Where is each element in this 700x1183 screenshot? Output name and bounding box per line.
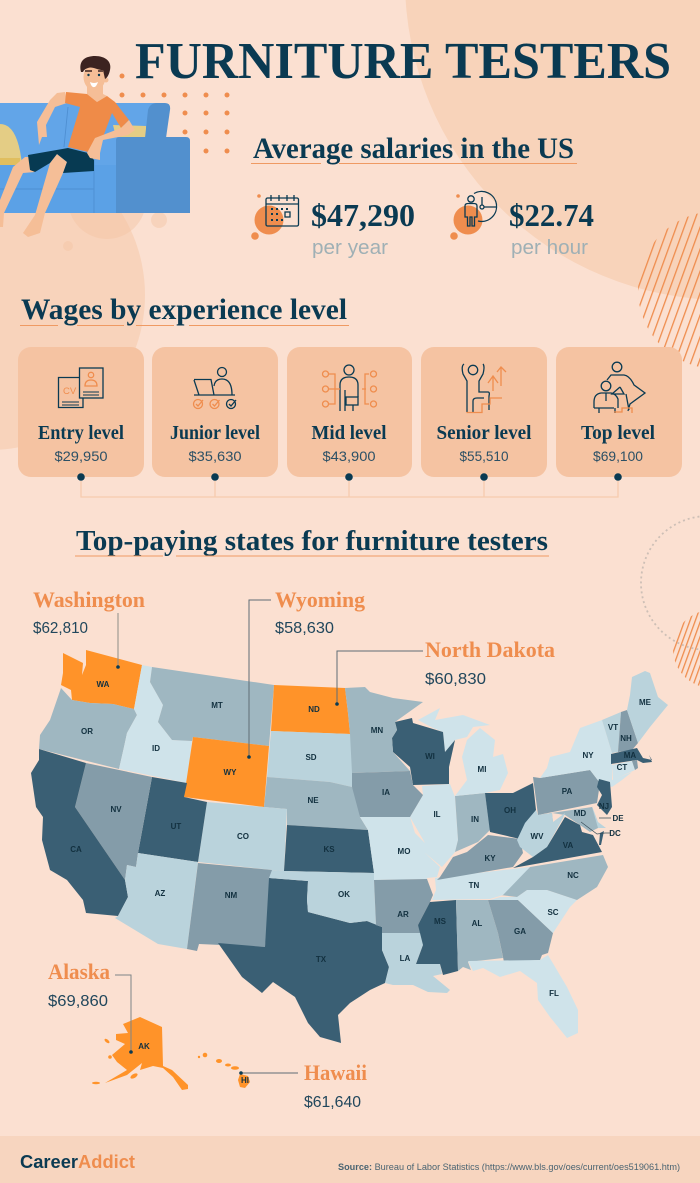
callout: Alaska bbox=[48, 959, 133, 1054]
state labels: MT bbox=[211, 701, 223, 710]
state labels: MD bbox=[574, 809, 586, 818]
state labels: NV bbox=[110, 805, 122, 814]
map of US states bbox=[31, 650, 668, 1090]
label: Senior level bbox=[436, 422, 532, 444]
label: Top level bbox=[581, 422, 655, 444]
state labels: IN bbox=[471, 815, 479, 824]
marker bbox=[345, 473, 353, 481]
state labels: SD bbox=[305, 753, 317, 762]
callout: Alaska: $69,860 bbox=[48, 993, 108, 1010]
icon: laptop and checks bbox=[194, 368, 236, 408]
state labels: TN bbox=[469, 881, 480, 890]
state labels: CT bbox=[617, 763, 627, 772]
state labels: ND bbox=[308, 705, 320, 714]
state labels: MN bbox=[371, 726, 383, 735]
callout: North Dakota bbox=[335, 637, 555, 706]
card: senior level bbox=[421, 347, 547, 481]
state labels: OR bbox=[81, 727, 93, 736]
state labels: FL bbox=[549, 989, 559, 998]
salary value: $22.74 bbox=[509, 197, 594, 233]
illustration: man on sofa bbox=[0, 56, 190, 237]
state labels: ME bbox=[639, 698, 652, 707]
state labels: NY bbox=[582, 751, 594, 760]
background shape: dotted circle bbox=[641, 516, 700, 650]
callout: Washington bbox=[33, 587, 145, 669]
heading: top-paying states: Top-paying states for furniture testers bbox=[76, 525, 548, 557]
icon: superhero leader bbox=[594, 362, 645, 413]
state labels: HI bbox=[241, 1076, 249, 1085]
state labels: AK bbox=[138, 1042, 150, 1051]
decorative circles under sofa bbox=[63, 161, 167, 251]
icon: person with branches bbox=[322, 365, 376, 411]
state labels bbox=[70, 680, 652, 1085]
card: top level bbox=[556, 347, 682, 481]
state labels: OH bbox=[504, 806, 516, 815]
background shape: left circle bbox=[0, 140, 145, 450]
icon: climbing stairs bbox=[462, 364, 506, 412]
wage: $29,950 bbox=[54, 448, 108, 464]
state labels: SC bbox=[547, 908, 559, 917]
Hawaii bbox=[198, 1053, 250, 1088]
state labels: MA bbox=[624, 751, 636, 760]
background shape: striped circle upper bbox=[638, 211, 700, 369]
callout: Alaska: Alaska bbox=[48, 959, 110, 984]
state labels: OK bbox=[338, 890, 350, 899]
state labels: NM bbox=[225, 891, 238, 900]
icon: calendar bbox=[251, 194, 298, 240]
heading: wages by experience: Wages by experience level bbox=[21, 293, 347, 326]
state labels: VT bbox=[608, 723, 618, 732]
orange dot grid bbox=[120, 74, 230, 154]
icon: CV documents: CV bbox=[63, 386, 77, 397]
callout: Hawaii bbox=[239, 1060, 367, 1111]
background shape: top right circle bbox=[405, 0, 700, 300]
state labels: VA bbox=[563, 841, 573, 850]
state labels: WV bbox=[531, 832, 544, 841]
salary unit: per hour bbox=[511, 237, 588, 259]
state labels: GA bbox=[514, 927, 526, 936]
state labels: MS bbox=[434, 917, 447, 926]
salary value: $47,290 bbox=[311, 197, 415, 233]
state labels: TX bbox=[316, 955, 327, 964]
state labels: ID bbox=[152, 744, 160, 753]
state labels: AR bbox=[397, 910, 409, 919]
callout: Hawaii: $61,640 bbox=[304, 1094, 361, 1111]
state labels: IA bbox=[382, 788, 390, 797]
state labels: UT bbox=[171, 822, 181, 831]
wage: $43,900 bbox=[322, 448, 376, 464]
callout: Washington: Washington bbox=[33, 587, 145, 612]
stat: hourly salary bbox=[450, 191, 594, 259]
heading: average salaries: Average salaries in the US bbox=[253, 132, 574, 165]
state labels: DC bbox=[609, 829, 621, 838]
state labels: WI bbox=[425, 752, 435, 761]
state labels: WY bbox=[224, 768, 237, 777]
title: FURNITURE TESTERS bbox=[135, 33, 671, 90]
logo: CareerAddict bbox=[20, 1152, 135, 1172]
state labels: AL bbox=[472, 919, 482, 928]
state labels: NC bbox=[567, 871, 579, 880]
state labels: NE bbox=[307, 796, 319, 805]
callout: North Dakota: North Dakota bbox=[425, 637, 555, 662]
marker bbox=[77, 473, 85, 481]
marker bbox=[614, 473, 622, 481]
marker bbox=[480, 473, 488, 481]
wage: $55,510 bbox=[460, 448, 509, 464]
state labels: CO bbox=[237, 832, 249, 841]
state labels: NH bbox=[620, 734, 632, 743]
salary unit: per year bbox=[312, 237, 388, 259]
state labels: MI bbox=[478, 765, 486, 774]
state labels: IL bbox=[433, 810, 441, 819]
icon: clock and person bbox=[450, 191, 497, 240]
callout: Wyoming: Wyoming bbox=[275, 587, 365, 612]
Alaska bbox=[92, 1017, 188, 1090]
stat: yearly salary bbox=[251, 194, 415, 259]
state labels: WA bbox=[97, 680, 110, 689]
callout: Hawaii: Hawaii bbox=[304, 1060, 367, 1085]
state labels: LA bbox=[400, 954, 411, 963]
callout: North Dakota: $60,830 bbox=[425, 671, 486, 688]
state labels: CA bbox=[70, 845, 82, 854]
state labels: AZ bbox=[155, 889, 165, 898]
card: entry level bbox=[18, 347, 144, 481]
background shape: striped circle lower bbox=[673, 610, 700, 688]
callout: Wyoming: $58,630 bbox=[275, 620, 334, 637]
callout: Washington: $62,810 bbox=[33, 620, 88, 637]
marker bbox=[211, 473, 219, 481]
wage: $35,630 bbox=[188, 448, 242, 464]
label: Junior level bbox=[170, 422, 260, 444]
label: Mid level bbox=[312, 422, 387, 444]
label: Entry level bbox=[38, 422, 124, 444]
state labels: PA bbox=[562, 787, 572, 796]
state labels: KY bbox=[484, 854, 496, 863]
state labels: NJ bbox=[599, 802, 609, 811]
footer bar bbox=[0, 1136, 700, 1183]
state labels: DE bbox=[612, 814, 624, 823]
wage: $69,100 bbox=[593, 448, 643, 464]
man bbox=[0, 56, 135, 237]
state labels: KS bbox=[323, 845, 335, 854]
sofa bbox=[0, 103, 190, 213]
state labels: MO bbox=[398, 847, 410, 856]
connector lines bbox=[81, 481, 618, 497]
source: Source: Bureau of Labor Statistics (https://www.bls.gov/oes/current/oes519061.htm) bbox=[338, 1162, 680, 1173]
card: mid level bbox=[287, 347, 412, 481]
callout: Wyoming bbox=[247, 587, 365, 759]
card: junior level bbox=[152, 347, 278, 481]
